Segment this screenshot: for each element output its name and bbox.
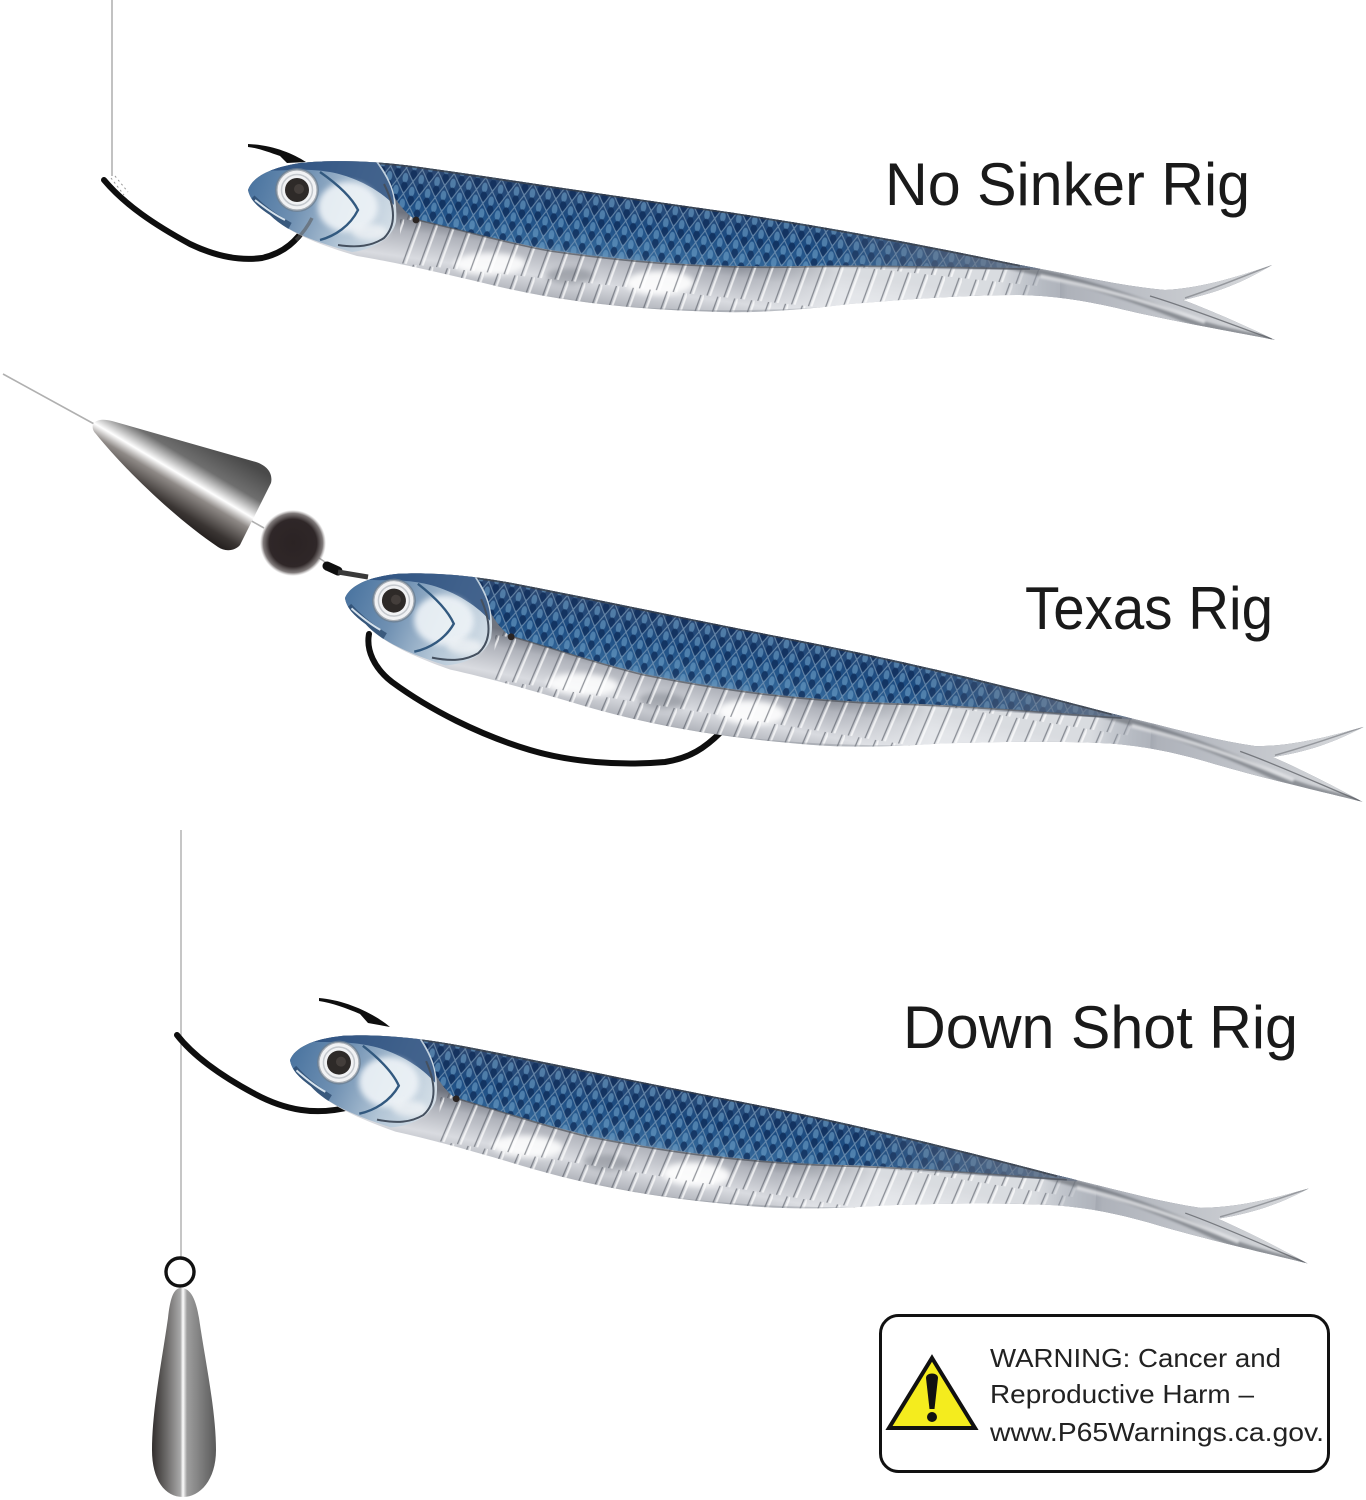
hook [104, 144, 308, 259]
bead [260, 510, 326, 576]
warning text: Reproductive Harm – [990, 1379, 1255, 1409]
label: Texas Rig: Texas Rig [1025, 575, 1273, 642]
rig 1: No Sinker Rig [104, 0, 1290, 350]
lure [244, 158, 1290, 350]
split ring [166, 1258, 194, 1286]
label: No Sinker Rig: No Sinker Rig [885, 151, 1250, 218]
label: Down Shot Rig: Down Shot Rig [903, 994, 1298, 1061]
lure [333, 566, 1366, 813]
lure [278, 1028, 1332, 1274]
line through sinker [3, 374, 328, 564]
warning text [989, 1343, 1324, 1447]
rig 2: Texas Rig [3, 374, 1366, 813]
panel: warning [880, 1316, 1328, 1472]
warning box [880, 1316, 1328, 1472]
bullet sinker [93, 420, 271, 550]
fishing line [111, 0, 113, 176]
rig 3: Down Shot Rig [152, 830, 1332, 1497]
hook [327, 566, 721, 764]
fishing line [180, 830, 182, 1258]
warning text: www.P65Warnings.ca.gov. [989, 1417, 1324, 1447]
icon: warning triangle [889, 1358, 975, 1428]
hook [177, 998, 390, 1111]
drop-shot sinker [152, 1288, 216, 1497]
warning text: WARNING: Cancer and [990, 1343, 1281, 1373]
hook shadow seen through lure 1 [296, 218, 312, 240]
